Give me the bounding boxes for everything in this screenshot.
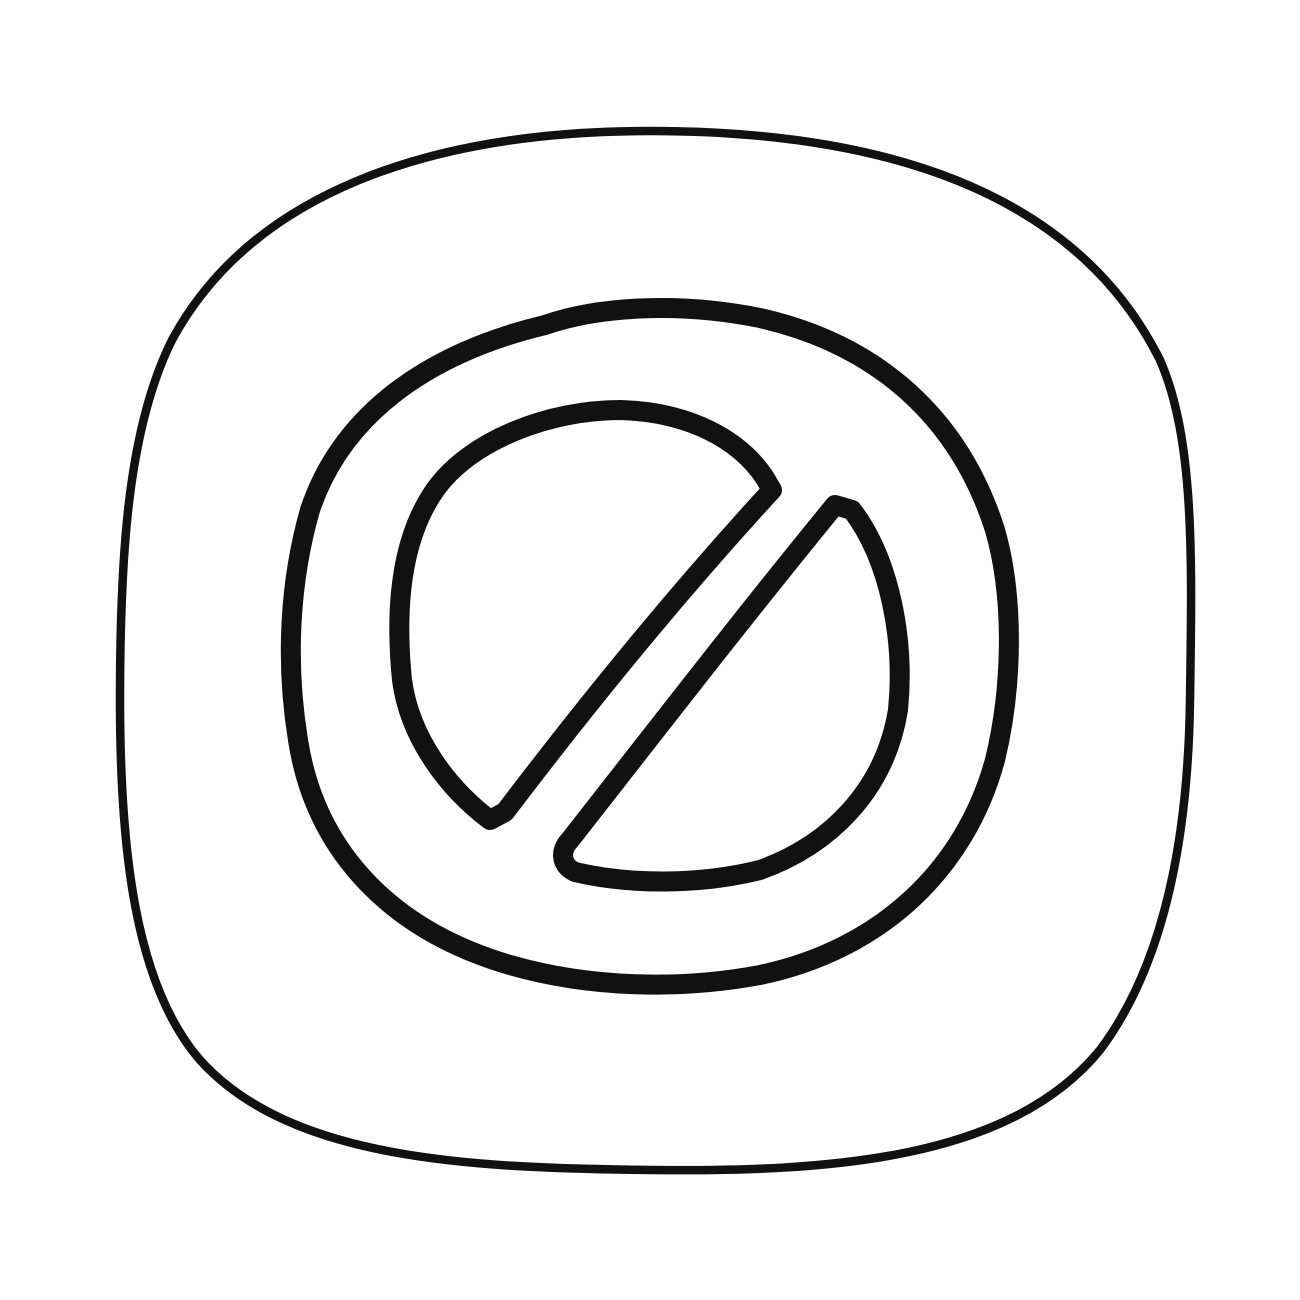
right half disc xyxy=(563,505,900,882)
ring outer outline xyxy=(291,308,1009,985)
outer rounded frame xyxy=(120,131,1191,1170)
left half disc xyxy=(399,410,772,820)
